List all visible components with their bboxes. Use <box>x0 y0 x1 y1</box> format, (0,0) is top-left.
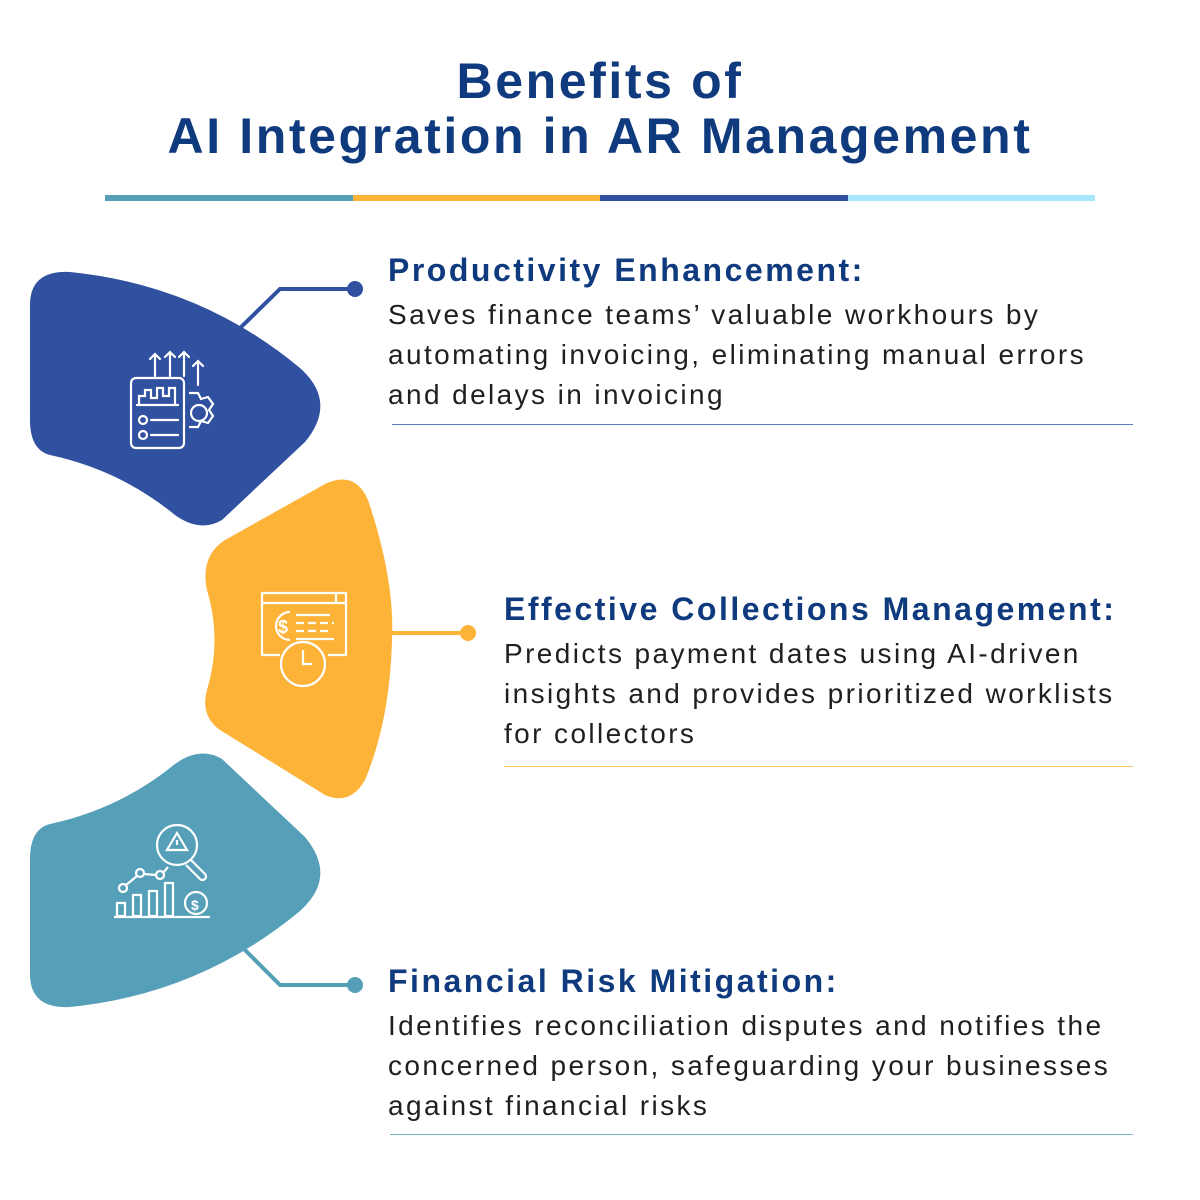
shape: productivity (blue) <box>30 272 363 525</box>
text block: collections: insights and provides prioritized worklists <box>504 678 1115 709</box>
icon: risk chart <box>114 825 210 917</box>
text block: productivity: and delays in invoicing <box>388 379 725 410</box>
text block: productivity: Saves finance teams’ valuable workhours by <box>388 299 1040 330</box>
icon: report with gear <box>131 352 213 448</box>
connector: teal <box>235 940 363 993</box>
title: AI Integration in AR Management <box>168 108 1032 164</box>
shape: collections (orange) <box>205 480 476 798</box>
icon: risk chart: $ <box>191 897 199 913</box>
text block: risk: Financial Risk Mitigation: <box>388 963 839 999</box>
title: Benefits of <box>457 53 743 109</box>
connector: blue <box>233 289 355 335</box>
text block: productivity <box>388 252 1086 410</box>
connector: orange <box>392 625 476 641</box>
text block: collections <box>504 591 1116 749</box>
text block: risk: against financial risks <box>388 1090 709 1121</box>
text block: risk <box>388 963 1110 1121</box>
title <box>168 53 1032 164</box>
text block: productivity: Productivity Enhancement: <box>388 252 865 288</box>
shape: risk (teal) <box>30 754 363 1007</box>
text block: collections: Effective Collections Management: <box>504 591 1116 627</box>
text block: collections: Predicts payment dates using AI-driven <box>504 638 1081 669</box>
icon: invoice with clock <box>262 593 346 686</box>
text block: risk: concerned person, safeguarding your businesses <box>388 1050 1110 1081</box>
text block: productivity: automating invoicing, eliminating manual errors <box>388 339 1086 370</box>
color bar <box>105 195 1095 201</box>
text block: collections: for collectors <box>504 718 696 749</box>
icon: invoice with clock: $ <box>278 617 288 637</box>
text block: risk: Identifies reconciliation disputes and notifies the <box>388 1010 1103 1041</box>
